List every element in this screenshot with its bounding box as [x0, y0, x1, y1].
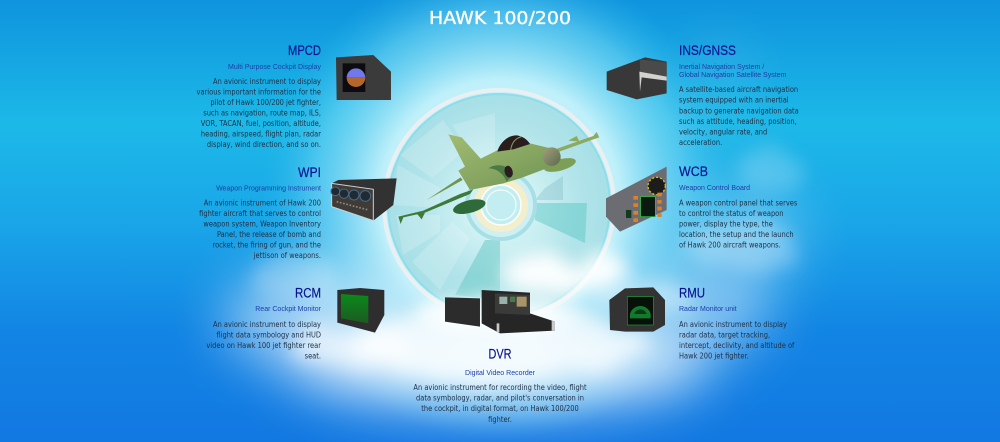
text block: INS/GNSS	[679, 85, 799, 147]
text block: INS/GNSS: such as attitude, heading, position,	[679, 117, 797, 126]
panel: WPI	[199, 165, 397, 260]
subtitle: INS/GNSS: Inertial Navigation System /	[679, 64, 764, 71]
disc overlay cloud	[410, 252, 624, 331]
compact disc	[384, 90, 614, 320]
heading: RCM: RCM	[295, 286, 321, 300]
text block: RMU: An avionic instrument to display	[679, 320, 788, 329]
text block: INS/GNSS: system equipped with an inertial	[679, 95, 789, 105]
text block: WCB: location, the setup and the launch	[679, 230, 794, 239]
text block: RMU: Hawk 200 jet fighter.	[679, 351, 749, 361]
text block: WCB	[679, 198, 798, 250]
subtitle: RMU: Radar Monitor unit	[679, 306, 737, 313]
panel: DVR	[413, 290, 587, 424]
subtitle: WCB: Weapon Control Board	[679, 185, 750, 192]
subtitle: DVR: Digital Video Recorder	[465, 370, 536, 377]
heading: MPCD: MPCD	[288, 43, 321, 58]
heading: RMU: RMU	[679, 286, 705, 300]
text block: RMU	[679, 320, 795, 361]
panel: RCM	[206, 286, 384, 361]
text block: RCM: flight data symbology and HUD	[216, 330, 321, 340]
text block: INS/GNSS: acceleration.	[679, 138, 722, 147]
text block: INS/GNSS: backup to generate navigation data	[679, 106, 799, 116]
subtitle: MPCD: Multi Purpose Cockpit Display	[228, 64, 321, 71]
subtitle: INS/GNSS	[679, 64, 787, 79]
heading: INS/GNSS: INS/GNSS	[679, 43, 736, 58]
icon: RCM device	[337, 288, 384, 333]
text block: RCM: video on Hawk 100 jet fighter rear	[206, 341, 321, 350]
icon: WCB device	[606, 167, 667, 232]
text block: MPCD	[197, 77, 322, 149]
text block: WPI: Panel, the release of bomb and	[217, 230, 321, 239]
text block: WCB: A weapon control panel that serves	[679, 198, 798, 208]
text block: RMU: intercept, declivity, and altitude of	[679, 341, 795, 350]
text block: DVR: the cockpit, in digital format, on Hawk 100/200	[421, 404, 579, 413]
clouds	[225, 40, 800, 407]
heading: WPI: WPI	[298, 165, 321, 180]
text block: MPCD: VOR, TACAN, fuel, position, altitude,	[201, 119, 321, 128]
text block: MPCD: pilot of Hawk 100/200 jet fighter,	[210, 98, 321, 107]
text block: WPI	[199, 198, 322, 260]
text block: WPI: rocket, the firing of gun, and the	[213, 240, 322, 250]
heading: DVR: DVR	[488, 346, 512, 362]
text block: WCB: to control the status of weapon	[679, 209, 784, 218]
icon: INS/GNSS device	[607, 57, 667, 99]
text block: WCB: power, display the type, the	[679, 219, 773, 229]
text block: DVR	[413, 383, 587, 424]
text block: DVR: fighter.	[488, 415, 512, 424]
icon: RMU device	[609, 287, 665, 332]
subtitle: WPI: Weapon Programming Instrument	[216, 186, 321, 192]
text block: MPCD: An avionic instrument to display	[213, 77, 322, 86]
text block: WPI: weapon system, Weapon Inventory	[203, 219, 322, 229]
heading: WCB: WCB	[679, 164, 708, 179]
text block: RMU: radar data, target tracking,	[679, 330, 770, 340]
icon: WPI device	[331, 178, 397, 221]
icon: MPCD device	[336, 55, 391, 100]
text block: WCB: of Hawk 200 aircraft weapons.	[679, 240, 781, 250]
text block: RCM	[206, 320, 322, 361]
text block: MPCD: heading, airspeed, flight plan, radar	[201, 129, 321, 139]
fighter jet	[398, 132, 599, 224]
title: HAWK 100/200	[429, 9, 571, 29]
text block: RCM: seat.	[305, 351, 321, 361]
text block: RCM: An avionic instrument to display	[213, 320, 322, 329]
panel: MPCD	[197, 43, 391, 149]
text block: INS/GNSS: velocity, angular rate, and	[679, 127, 767, 137]
text block: WPI: An avionic instrument of Hawk 200	[204, 198, 321, 208]
text block: MPCD: various important information for the	[197, 87, 322, 97]
panel: RMU	[609, 286, 795, 361]
text block: DVR: An avionic instrument for recording the video, flight	[413, 383, 587, 392]
icon: DVR device	[445, 290, 555, 333]
text block: WPI: fighter aircraft that serves to control	[199, 209, 321, 218]
panel: INS/GNSS	[607, 43, 799, 147]
subtitle: RCM: Rear Cockpit Monitor	[255, 306, 322, 313]
panel: WCB	[606, 164, 798, 250]
text block: DVR: data symbology, radar, and pilot's conversation in	[416, 393, 584, 403]
subtitle: INS/GNSS: Global Navigation Satellite System	[679, 72, 787, 79]
text block: MPCD: such as navigation, route map, ILS,	[203, 108, 321, 118]
text block: MPCD: display, wind direction, and so on.	[207, 140, 321, 149]
text block: INS/GNSS: A satellite-based aircraft navigation	[679, 85, 798, 94]
text block: WPI: jettison of weapons.	[253, 251, 321, 260]
